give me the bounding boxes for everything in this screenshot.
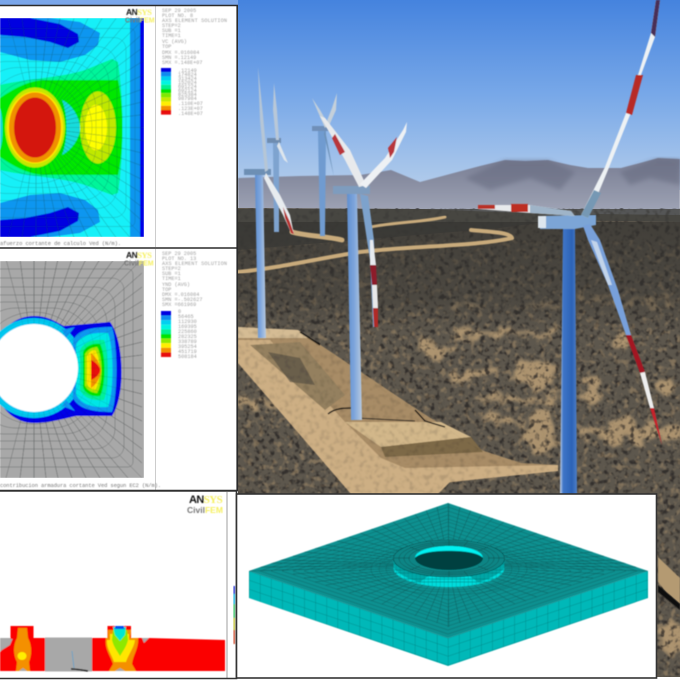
turbine pad and embankment (238, 327, 558, 494)
ring inner hole (415, 546, 483, 570)
legend: reinforcement values: SEP 29 2005 (162, 251, 196, 257)
panel: 3D foundation mesh (236, 494, 656, 678)
legend: shear stress values: .148E+07 (178, 111, 203, 117)
legend: reinforcement values: 112930 (178, 319, 197, 325)
legend: reinforcement values (161, 251, 227, 360)
legend: reinforcement values: AXS ELEMENT SOLUTION (162, 261, 227, 267)
turbine 4: far tower (267, 83, 288, 232)
nacelle (538, 215, 596, 229)
legend: shear stress values (161, 8, 227, 117)
legend: shear stress values: SMN =.12149 (162, 55, 196, 61)
panel: cross-section contour plot (0, 491, 236, 680)
photo: wind farm landscape (238, 0, 680, 680)
legend: shear stress values: TOP (162, 44, 171, 50)
section contours (0, 626, 225, 672)
legend: shear stress values: .12149 (178, 68, 197, 74)
panel: shear reinforcement contribution plot (0, 248, 238, 491)
winding access roads (238, 217, 512, 272)
caption: shear stress: afuerzo cortante de calculo Ved (N/m). (0, 241, 121, 247)
central pedestal ring (394, 540, 504, 587)
contour plot: reinforcement (0, 259, 144, 478)
legend: reinforcement values: 0 (178, 309, 181, 315)
legend: shear stress values: 987984 (178, 96, 197, 102)
legend: shear stress values: .123E+07 (178, 106, 203, 112)
logo: ANSYS CivilFEM: CivilFEM (187, 505, 223, 515)
mini legend (234, 586, 235, 644)
legend: reinforcement values: SMN =-.502627 (162, 297, 202, 303)
legend: shear stress values: 313424 (178, 76, 197, 82)
panel frame (0, 6, 237, 248)
legend: shear stress values: .110E+07 (178, 101, 203, 107)
legend: shear stress values: SUB =1 (162, 28, 181, 34)
sky (238, 0, 680, 190)
legend: shear stress values: DMX =.016084 (162, 50, 199, 56)
legend: reinforcement values: 451719 (178, 349, 197, 355)
plot divider (226, 492, 228, 678)
legend: reinforcement values: TIME=1 (162, 276, 181, 282)
caption: reinforcement: contribucion armadura cortante Ved segun EC2 (N/m). (0, 483, 161, 489)
foundation slab (249, 503, 648, 666)
turbine 2: middle tower and blades (320, 116, 407, 420)
upper blade (581, 0, 660, 218)
legend: reinforcement values: TOP (162, 287, 171, 293)
legend: reinforcement values: 169395 (178, 324, 197, 330)
legend: shear stress values: 152024 (178, 80, 197, 86)
legend: shear stress values: STEP=2 (162, 23, 181, 29)
distant mountains (238, 156, 680, 215)
legend: reinforcement values: 225860 (178, 329, 197, 335)
contour plot: shear stress (0, 18, 144, 238)
turbine 3: left tower (244, 67, 294, 338)
logo: ANSYS CivilFEM: CivilFEM (125, 18, 155, 24)
slab right side (448, 571, 648, 666)
logo: ANSYS CivilFEM (125, 7, 155, 24)
legend: reinforcement values: STEP=2 (162, 266, 181, 272)
panel frame (0, 248, 237, 490)
sandy patches (238, 298, 680, 656)
turbine 1: main foreground tower and blades (478, 0, 662, 494)
plot divider (155, 249, 156, 490)
logo: ANSYS CivilFEM: ANSYS (189, 494, 223, 506)
lower blade (583, 224, 631, 335)
legend: shear stress values: 692124 (178, 88, 197, 94)
slab left side (249, 571, 448, 666)
legend: reinforcement values: 395254 (178, 344, 197, 350)
plot divider (155, 6, 156, 247)
legend: shear stress values: 825384 (178, 92, 197, 98)
legend: shear stress values: AXS ELEMENT SOLUTION (162, 18, 227, 24)
legend: reinforcement values: YND (AVG) (162, 282, 190, 288)
legend: reinforcement values: SUB =1 (162, 271, 181, 277)
slab top with mesh (249, 503, 648, 638)
turbine 5: far tower (312, 93, 337, 236)
legend: reinforcement values: 56465 (178, 314, 194, 320)
logo: ANSYS CivilFEM (124, 250, 154, 268)
logo: ANSYS CivilFEM: ANSYS (126, 7, 152, 17)
legend: reinforcement values: 508184 (178, 354, 197, 360)
legend: shear stress values: PLOT NO. 8 (162, 13, 193, 19)
logo: ANSYS CivilFEM (187, 494, 223, 515)
legend: shear stress values: TIME=1 (162, 33, 181, 39)
legend: reinforcement values: PLOT NO. 13 (162, 256, 196, 262)
legend: shear stress values: 174824 (178, 72, 197, 78)
legend: shear stress values: SEP 29 2005 (162, 8, 196, 14)
legend: reinforcement values: SMX =661969 (162, 302, 196, 308)
sky strip above simulation panel (0, 0, 238, 5)
legend: reinforcement values: 282325 (178, 334, 197, 340)
legend: shear stress values: SMX =.148E+07 (162, 60, 202, 66)
desert terrain (238, 208, 680, 680)
panel: shear stress contour plot (0, 5, 238, 248)
panel frame (0, 491, 236, 678)
legend: reinforcement values: 338789 (178, 339, 197, 345)
logo: ANSYS CivilFEM: ANSYS (126, 250, 152, 260)
legend: shear stress values: 691224 (178, 84, 197, 90)
legend: reinforcement values: DMX =.016084 (162, 292, 199, 298)
legend: shear stress values: VC (AVG) (162, 39, 187, 45)
horizontal blade (478, 205, 575, 216)
logo: ANSYS CivilFEM: CivilFEM (124, 260, 154, 268)
